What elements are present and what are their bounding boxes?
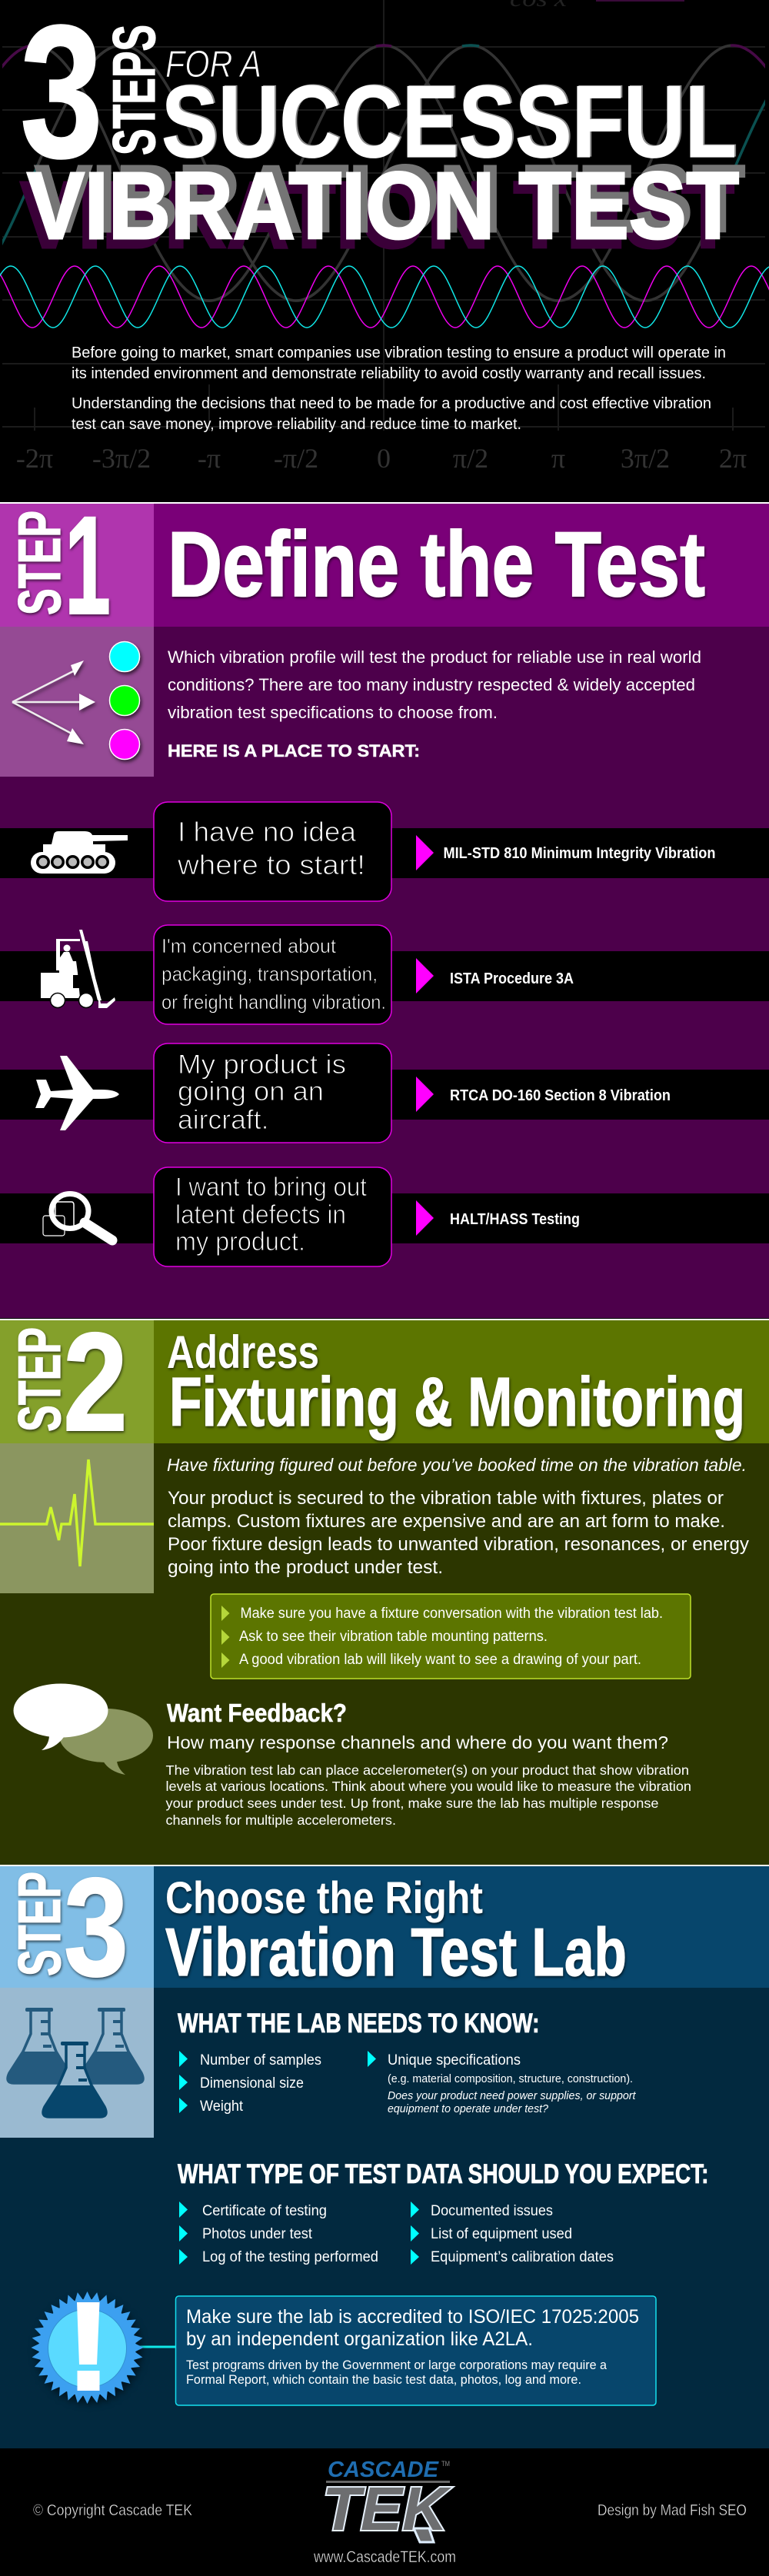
heading: step 1 number [5,487,111,644]
heading: what the lab needs to know: WHAT THE LAB NEEDS TO KNOW: [178,2009,540,2039]
callout: lab checklist: Make sure you have a fixture conversation with the vibration test lab. [240,1606,663,1622]
list: test data [179,2202,614,2265]
arrow [416,1200,434,1236]
callout: packaging: packaging, transportation, [161,963,378,986]
callout: accreditation [175,2296,656,2405]
arrow [416,1077,434,1112]
callout: aircraft: going on an [178,1077,324,1107]
callout: lab checklist: A good vibration lab will likely want to see a drawing of your part. [239,1652,641,1668]
text: fixturing paragraph: going into the product under test. [168,1557,443,1578]
decorative rows [0,828,769,1243]
callout: accreditation: by an independent organization like A2LA. [186,2328,533,2350]
heading: step 2 number [5,1303,128,1460]
list: test data: Log of the testing performed [202,2249,378,2265]
callout: lab checklist [211,1594,691,1679]
heading: step 3 number: STEP [5,1872,73,1976]
text: step 1 intro [168,647,701,722]
icon: arrows to three options [12,641,140,760]
heading: step 2 number: STEP [5,1327,73,1432]
text: designer credit: Design by Mad Fish SEO [598,2502,747,2519]
list: test data: Certificate of testing [202,2203,327,2219]
text: introduction: Before going to market, smart companies use vibration testing to ensure a product will operate in [72,344,726,361]
axis labels: 0 [377,443,391,474]
axis labels: 3π/2 [621,443,670,474]
list: lab needs: Dimensional size [200,2075,304,2092]
text: copyright: © Copyright Cascade TEK [33,2502,193,2519]
callout: no idea [154,802,391,901]
callout: latent defects: my product. [175,1227,305,1256]
text: here is a place to start: HERE IS A PLACE TO START: [168,741,420,760]
text: fixturing paragraph: clamps. Custom fixtures are expensive and are an art form to make. [168,1511,725,1532]
row: no idea [31,802,715,901]
heading: want feedback: Want Feedback? [167,1699,347,1727]
logo: Cascade TEK: TM [441,2460,450,2468]
icon: exclamation badge [25,2285,177,2410]
label: ISTA: ISTA Procedure 3A [450,970,574,987]
callout: latent defects [154,1167,391,1266]
callout: no idea: I have no idea [178,816,357,847]
heading: step 1 number: 1 [65,487,111,644]
panel: header [0,0,769,502]
panel: step 1 [0,487,769,1318]
axis labels: -2π [16,443,53,474]
heading: step 2 number: 2 [63,1303,128,1460]
list: lab needs: Does your product need power supplies, or support [388,2089,636,2102]
list: test data: Photos under test [202,2226,313,2242]
arrow [416,835,434,870]
title [20,0,745,268]
axis labels: -3π/2 [92,443,151,474]
callout: lab checklist: Ask to see their vibration table mounting patterns. [239,1629,548,1645]
arrow [416,958,434,993]
text: feedback body: levels at various locations. Think about where you would like to measure the vibration [166,1779,691,1794]
icon: forklift [41,930,115,1008]
label: RTCA: RTCA DO-160 Section 8 Vibration [450,1087,671,1104]
heading: choose the right lab [165,1873,627,1990]
axis labels: -π [198,443,221,474]
callout: latent defects: latent defects in [175,1200,346,1230]
text: response channels: How many response channels and where do you want them? [167,1732,668,1752]
icon: heartbeat line [0,1459,154,1566]
callout: no idea: where to start! [177,849,365,880]
label: HALT/HASS: HALT/HASS Testing [450,1211,580,1228]
axis labels: π [551,443,565,474]
icon: tank [31,831,128,874]
heading: fixturing and monitoring [167,1326,745,1441]
list: lab needs: Number of samples [200,2052,321,2068]
list: test data: Documented issues [431,2203,553,2219]
icon: magnifying glass [43,1193,112,1240]
text: step 1 intro: Which vibration profile will test the product for reliable use in real world [168,647,701,667]
row: latent defects [43,1167,580,1266]
list: lab needs [179,2051,636,2115]
list: lab needs: Unique specifications [388,2052,521,2068]
text: feedback body: your product sees under test. Up front, make sure the lab has multiple response [166,1796,658,1811]
text: introduction: its intended environment and demonstrate reliability to avoid costly warranty and recall issues. [72,365,706,382]
row: aircraft [35,1043,671,1143]
list: lab needs: Weight [200,2098,244,2115]
logo: Cascade TEK: TEK [322,2474,451,2543]
text: step 1 intro: vibration test specifications to choose from. [168,703,498,722]
callout: aircraft: aircraft. [178,1105,269,1135]
text: fixturing tagline: Have fixturing figured out before you’ve booked time on the vibration table. [167,1455,747,1475]
list: lab needs: (e.g. material composition, structure, construction). [388,2072,633,2085]
row: packaging [41,925,574,1024]
panel: footer [0,2448,769,2576]
text: fixturing paragraph: Poor fixture design leads to unwanted vibration, resonances, or energy [168,1534,749,1555]
text: fixturing paragraph [168,1488,749,1578]
list: test data: Equipment’s calibration dates [431,2249,614,2265]
text: introduction: test can save money, improve reliability and reduce time to market. [72,416,521,433]
callout: aircraft [154,1043,391,1143]
icon: speech bubbles [14,1684,153,1775]
label: MIL-STD: MIL-STD 810 Minimum Integrity Vibration [443,845,715,862]
logo: Cascade TEK: CASCADE [328,2458,440,2482]
chart: background cosine and sine curves [0,45,769,301]
text: introduction: Understanding the decisions that need to be made for a productive and cost effective vibration [72,395,711,412]
callout: packaging: or freight handling vibration. [161,990,386,1013]
heading: choose the right lab: Choose the Right [165,1873,483,1923]
axis labels: 2π [719,443,747,474]
heading: step 3 number: 3 [64,1849,128,2005]
heading: fixturing and monitoring: Address [167,1326,319,1378]
heading: step 1 number: STEP [5,511,73,615]
callout: accreditation: Make sure the lab is accredited to ISO/IEC 17025:2005 [186,2306,639,2328]
callout: packaging [154,925,391,1024]
text: step 1 intro: conditions? There are too many industry respected & widely accepted [168,675,695,694]
callout: latent defects: I want to bring out [175,1173,368,1202]
text: introduction [72,344,726,433]
text: feedback body [166,1762,691,1828]
title: FOR A [165,44,261,85]
text: website: www.CascadeTEK.com [313,2548,456,2566]
panel: step 2 [0,1303,769,1865]
text: feedback body: The vibration test lab can place accelerometer(s) on your product that show vibration [166,1762,689,1778]
axis labels: π/2 [453,443,488,474]
heading: step 3 number [5,1849,128,2005]
list: lab needs: equipment to operate under test? [388,2102,549,2115]
icon: airplane [35,1056,119,1130]
text: fixturing paragraph: Your product is secured to the vibration table with fixtures, plates or [168,1488,724,1509]
text: feedback body: channels for multiple accelerometers. [166,1812,396,1828]
axis labels [16,443,747,474]
panel: step 3 [0,1849,769,2448]
callout: accreditation: Formal Report, which contain the basic test data, photos, log and more. [186,2372,581,2387]
callout: packaging: I'm concerned about [161,934,337,957]
heading: choose the right lab: Vibration Test Lab [165,1914,627,1990]
callout: accreditation: Test programs driven by the Government or large corporations may require a [186,2358,608,2372]
callout: aircraft: My product is [178,1050,346,1080]
list: test data: List of equipment used [431,2226,572,2242]
icon: lab flasks [8,2008,143,2117]
axis labels: -π/2 [274,443,318,474]
chart: magenta and cyan sine waves [0,266,769,328]
